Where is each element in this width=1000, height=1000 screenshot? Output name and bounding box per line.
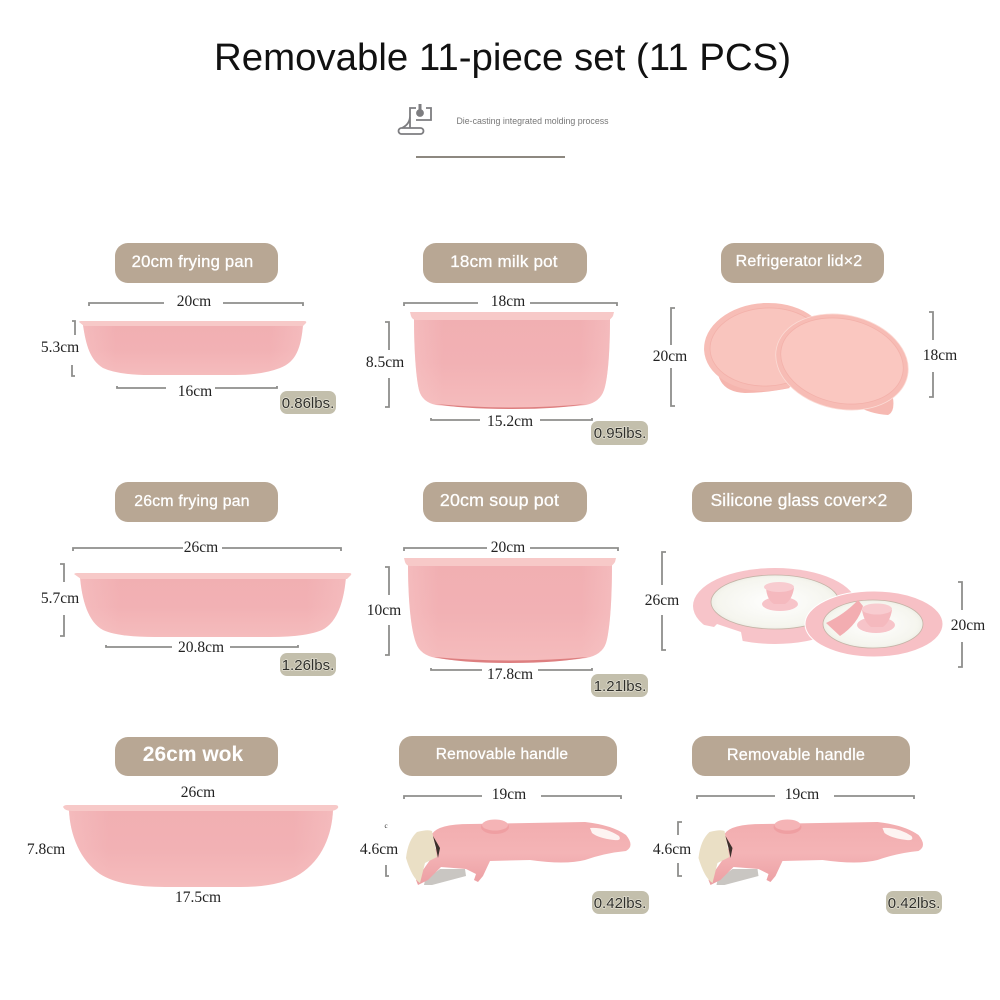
dimension labels: [41, 293, 212, 400]
dimension labels: 19cm: [492, 786, 526, 803]
heading pill: [692, 482, 912, 522]
panel: 18cm milk pot: [366, 243, 648, 445]
heading pill: Silicone glass cover×2: [711, 490, 887, 510]
heading pill: Removable handle: [727, 746, 865, 764]
heading pill: [721, 243, 884, 283]
dimension labels: [366, 293, 533, 430]
heading pill: 26cm frying pan: [134, 493, 250, 510]
dimension labels: 17.8cm: [487, 666, 533, 683]
dimension lines: [72, 303, 303, 388]
dimension labels: [27, 784, 221, 906]
dimension labels: 20cm: [951, 617, 985, 634]
dimension labels: c: [384, 822, 388, 830]
weight badge: 1.26lbs.: [282, 657, 334, 674]
dimension labels: 20cm: [491, 539, 525, 556]
dimension labels: [653, 786, 819, 858]
pot body: [404, 558, 616, 663]
panel: 26cm wok: [27, 737, 338, 906]
dimension labels: [41, 539, 224, 656]
heading pill: [399, 736, 617, 776]
panel: removable handle (right): [653, 736, 942, 914]
process underline: [416, 156, 565, 158]
weight badge: [592, 891, 649, 914]
wok body: [63, 805, 338, 887]
heading pill: [692, 736, 910, 776]
icon: die-casting machine: [398, 104, 431, 134]
weight badge: [591, 421, 648, 445]
dimension labels: 5.3cm: [41, 339, 79, 356]
dimension labels: 18cm: [923, 347, 957, 364]
handle: [698, 820, 923, 885]
dimension labels: 15.2cm: [487, 413, 533, 430]
lid: front: [767, 302, 917, 422]
dimension labels: 5.7cm: [41, 590, 79, 607]
weight badge: [591, 674, 648, 697]
heading pill: 18cm milk pot: [450, 252, 558, 271]
dimension labels: 7.8cm: [27, 841, 65, 858]
dimension labels: 4.6cm: [360, 841, 398, 858]
panel: silicone glass covers: [645, 482, 985, 667]
heading pill: [115, 482, 278, 522]
heading pill: [115, 737, 278, 776]
dimension lines: [678, 796, 914, 876]
weight badge: 0.42lbs.: [594, 895, 646, 912]
dimension labels: 26cm: [645, 592, 679, 609]
dimension lines: [386, 796, 621, 876]
weight badge: 0.95lbs.: [594, 425, 646, 442]
dimension labels: [653, 347, 957, 365]
weight badge: 0.86lbs.: [282, 395, 334, 412]
heading pill: 26cm wok: [143, 743, 244, 766]
dimension labels: [367, 539, 533, 683]
dimension lines: [385, 548, 618, 670]
dimension lines: [662, 552, 962, 667]
pan body: [74, 573, 351, 637]
panel: 20cm soup pot: [367, 482, 648, 697]
weight badge: [886, 891, 942, 914]
weight badge: 1.21lbs.: [594, 678, 646, 695]
pot body: [410, 312, 614, 409]
handle: [406, 820, 630, 885]
pan body: [79, 321, 306, 375]
panel: 26cm frying pan: [41, 482, 351, 676]
dimension labels: 20.8cm: [178, 639, 224, 656]
panel: refrigerator lids: [653, 243, 957, 422]
dimension lines: [385, 303, 617, 420]
heading pill: 20cm frying pan: [132, 252, 253, 271]
dimension labels: 19cm: [785, 786, 819, 803]
lid: back: [702, 300, 830, 394]
dimension labels: 17.5cm: [175, 889, 221, 906]
dimension labels: 20cm: [177, 293, 211, 310]
cover: large: [690, 568, 857, 648]
heading pill: [423, 482, 587, 522]
panel: 20cm frying pan: [41, 243, 336, 414]
dimension labels: 10cm: [367, 602, 401, 619]
dimension labels: [360, 786, 526, 858]
dimension labels: 8.5cm: [366, 354, 404, 371]
heading pill: Removable handle: [436, 746, 568, 763]
weight badge: [280, 653, 336, 676]
dimension labels: 26cm: [181, 784, 215, 801]
dimension labels: 16cm: [178, 383, 212, 400]
weight badge: [280, 391, 336, 414]
title: Removable 11-piece set (11 PCS): [214, 37, 791, 79]
panel: removable handle (middle): [360, 736, 649, 914]
dimension labels: [645, 592, 985, 634]
cover: small: [805, 591, 943, 657]
dimension labels: 20cm: [653, 348, 687, 365]
dimension lines: [671, 308, 933, 406]
process caption: Die-casting integrated molding process: [456, 116, 609, 126]
heading pill: [115, 243, 278, 283]
heading pill: [423, 243, 587, 283]
dimension labels: 4.6cm: [653, 841, 691, 858]
dimension lines: [60, 548, 341, 647]
dimension labels: 26cm: [184, 539, 218, 556]
heading pill: 20cm soup pot: [440, 490, 559, 510]
weight badge: 0.42lbs.: [888, 895, 940, 912]
dimension labels: 18cm: [491, 293, 525, 310]
heading pill: Refrigerator lid×2: [736, 253, 862, 270]
